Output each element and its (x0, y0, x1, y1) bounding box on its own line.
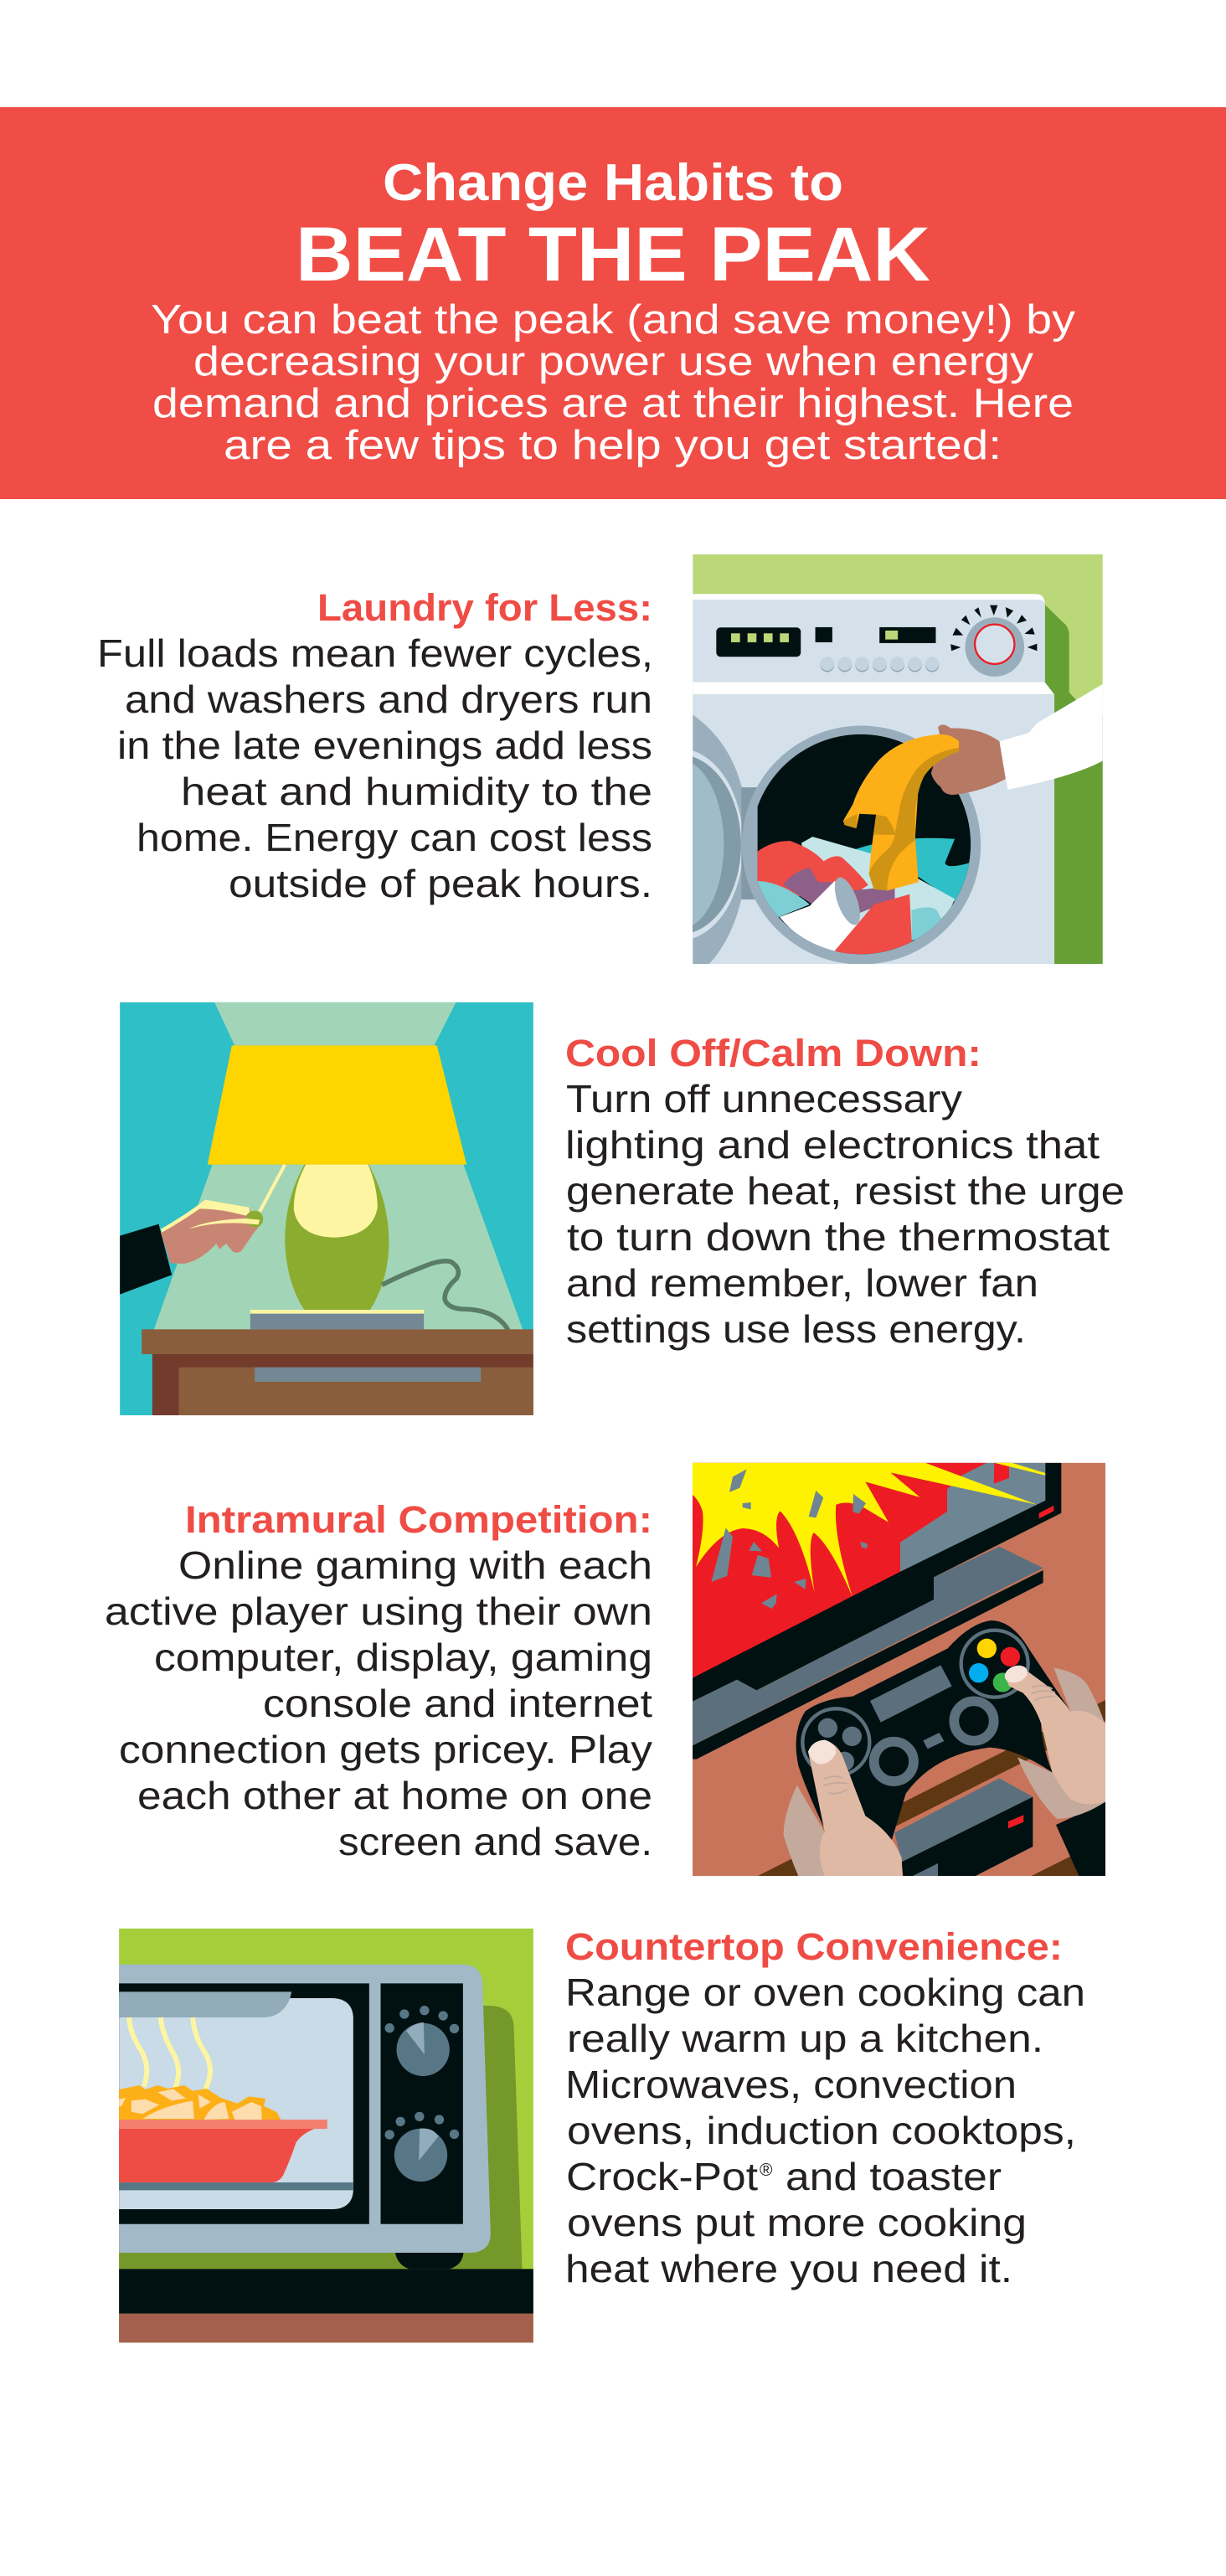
title: Change Habits to: Change Habits to (383, 154, 843, 212)
text block: introduction: You can beat the peak (and save money!) by (151, 297, 1076, 343)
text block: Cool Off/Calm Down: settings use less energy. (566, 1307, 1026, 1351)
lamp base (250, 1165, 424, 1329)
text block: Intramural Competition: each other at home on one (137, 1774, 652, 1817)
panel: header banner (0, 107, 1226, 499)
oven door and window (119, 1983, 369, 2224)
text block: introduction: demand and prices are at their highest. Here (152, 381, 1074, 426)
pull cord (260, 1165, 285, 1212)
text block: Countertop Convenience: ovens, induction cooktops, (567, 2109, 1076, 2152)
open door (614, 715, 759, 964)
text block: Intramural Competition: computer, display, gaming (154, 1636, 652, 1679)
rail and lower shelf (758, 1700, 1105, 1876)
heading: Intramural Competition: Intramural Competition: (185, 1498, 652, 1541)
controller (796, 1620, 1070, 1840)
hand and sleeve (931, 684, 1103, 795)
back of hands (784, 1668, 1105, 1876)
steam (129, 2017, 210, 2089)
text block: Laundry for Less: home. Energy can cost less (137, 816, 652, 859)
illustration: washing machine (693, 554, 1103, 964)
text block: Intramural Competition: Online gaming with each (178, 1543, 652, 1587)
text block: Cool Off/Calm Down: to turn down the thermostat (567, 1215, 1110, 1259)
panel buttons (821, 657, 939, 672)
yellow shirt (843, 734, 959, 890)
text block: Laundry for Less: heat and humidity to the (181, 770, 652, 813)
text block: Cool Off/Calm Down: Turn off unnecessary (566, 1077, 962, 1121)
drum with laundry (742, 726, 981, 965)
lamp shade (208, 1045, 466, 1165)
dial (950, 605, 1037, 677)
text block: Cool Off/Calm Down: generate heat, resist the urge (566, 1169, 1125, 1213)
text block: Cool Off/Calm Down (565, 1032, 1125, 1351)
text block: Intramural Competition: connection gets pricey. Play (119, 1728, 652, 1771)
heading: Countertop Convenience: Countertop Convenience: (565, 1925, 1063, 1968)
heading: Cool Off/Calm Down: Cool Off/Calm Down: (565, 1032, 981, 1074)
text block: Cool Off/Calm Down: lighting and electronics that (565, 1123, 1100, 1167)
text block: Countertop Convenience (565, 1925, 1085, 2290)
oven foot (395, 2253, 464, 2269)
text block: Laundry for Less (97, 586, 653, 905)
text block: Laundry for Less: in the late evenings add less (117, 724, 652, 767)
text block: introduction: are a few tips to help you get started: (224, 423, 1002, 468)
text block: introduction: decreasing your power use when energy (193, 339, 1034, 384)
illustration: toaster oven (119, 1928, 533, 2343)
text block: Countertop Convenience: heat where you need it. (565, 2247, 1012, 2290)
illustration: table lamp (120, 1002, 533, 1415)
text block: Countertop Convenience: Range or oven cooking can (565, 1971, 1085, 2014)
text block: Cool Off/Calm Down: and remember, lower fan (566, 1261, 1038, 1305)
text block: Intramural Competition: active player using their own (105, 1589, 652, 1633)
text block: Countertop Convenience: really warm up a kitchen. (567, 2017, 1043, 2060)
oven body (119, 1965, 491, 2253)
text block: Intramural Competition: console and internet (263, 1682, 652, 1725)
text block: Intramural Competition (105, 1498, 652, 1863)
text block: Laundry for Less: and washers and dryers run (125, 677, 652, 721)
game console (894, 1778, 1033, 1876)
heading: Laundry for Less: Laundry for Less: (317, 586, 652, 629)
food (119, 2085, 281, 2120)
text block: Countertop Convenience: ovens put more cooking (567, 2201, 1027, 2244)
thumbs (808, 1662, 1105, 1876)
control knobs (381, 1983, 463, 2224)
illustration: video game controller (693, 1462, 1105, 1876)
control panel displays (716, 627, 935, 657)
text block: Intramural Competition: screen and save. (338, 1820, 652, 1863)
nightstand (142, 1329, 533, 1415)
text block: Countertop Convenience: ® (760, 2161, 777, 2180)
text block: Countertop Convenience: Crock-Pot (566, 2155, 758, 2198)
hand pulling cord (120, 1200, 263, 1295)
television bezel and stand (693, 1463, 1061, 1759)
text block: introduction (151, 297, 1076, 468)
title: BEAT THE PEAK: BEAT THE PEAK (296, 212, 930, 297)
baking dish (119, 2120, 353, 2190)
power cord (382, 1261, 508, 1330)
text block: Countertop Convenience: and toaster (786, 2155, 1002, 2198)
text block: Laundry for Less: outside of peak hours. (229, 862, 652, 905)
text block: Laundry for Less: Full loads mean fewer cycles, (97, 631, 653, 675)
countertop (119, 2269, 533, 2342)
television screen with explosion (693, 1463, 1045, 1679)
text block: Countertop Convenience: Microwaves, convection (565, 2063, 1017, 2106)
